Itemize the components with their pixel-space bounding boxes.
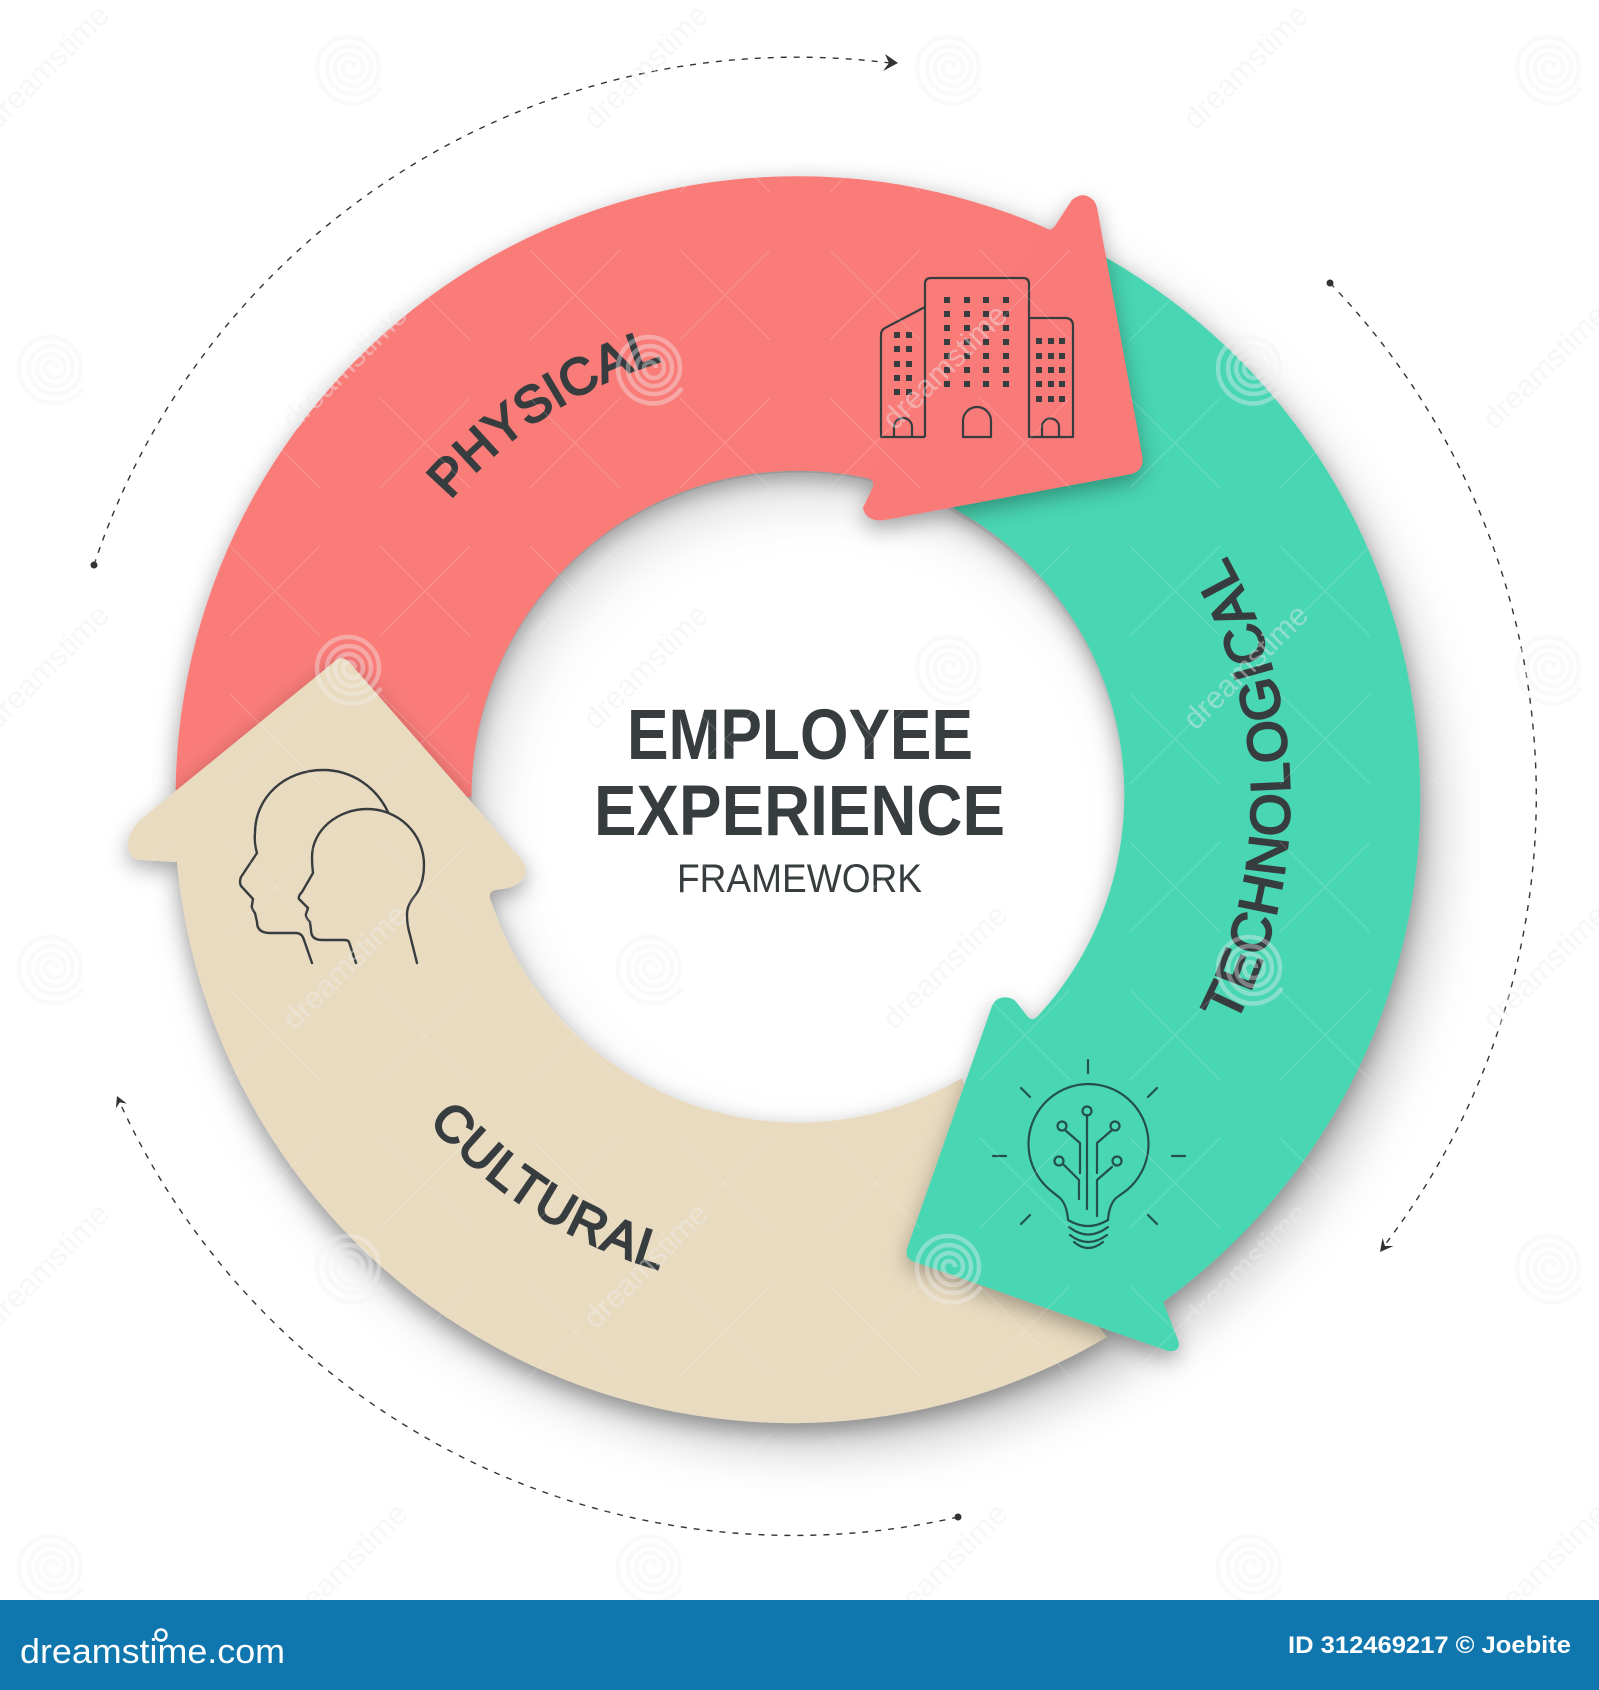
- panel: cultural arrow: [128, 658, 1107, 1423]
- panel: technological arrow: [907, 257, 1420, 1351]
- label: technological: TECHNOLOGICAL: [1200, 556, 1291, 1014]
- text: dreamstime: [576, 597, 715, 736]
- icon: light bulb with circuit: [993, 1060, 1185, 1248]
- footer credit: ID 312469217 © Joebite: [1288, 1632, 1571, 1659]
- text: dreamstime: [1176, 0, 1315, 136]
- text: dreamstime: [1176, 597, 1315, 736]
- text: dreamstime: [275, 1496, 414, 1635]
- label: physical: PHYSICAL: [426, 332, 662, 498]
- icon: office buildings: [881, 278, 1073, 437]
- ring soft shadow: [342, 352, 1290, 1300]
- text: dreamstime: [875, 1496, 1014, 1635]
- text: dreamstime: [875, 297, 1014, 436]
- panel: physical arrowhead shadow on green: [953, 258, 1153, 523]
- arrow: dashed right: [1326, 280, 1536, 1252]
- title: center text: EXPERIENCE: [594, 772, 1005, 851]
- text: dreamstime: [1176, 1196, 1315, 1335]
- footer logo: dreamstime.com: [20, 1633, 285, 1671]
- panel: physical arrowhead: [863, 195, 1143, 520]
- arrow: dashed top-left: [90, 54, 898, 568]
- panel: physical arrow: [176, 176, 1143, 797]
- title: center text: FRAMEWORK: [677, 857, 922, 901]
- text: dreamstime: [275, 297, 414, 436]
- arrow: dashed bottom: [116, 1096, 961, 1535]
- label: cultural: CULTURAL: [435, 1105, 660, 1271]
- icon: two human heads: [240, 770, 424, 963]
- title: center text: EMPLOYEE: [627, 696, 973, 775]
- icon: logo spiral: [156, 1630, 166, 1640]
- text: dreamstime: [576, 1196, 715, 1335]
- footer bar: [0, 1600, 1599, 1690]
- title: center text: [594, 696, 1005, 901]
- text: dreamstime: [576, 0, 715, 136]
- text: dreamstime: [275, 897, 414, 1036]
- text: dreamstime: [875, 897, 1014, 1036]
